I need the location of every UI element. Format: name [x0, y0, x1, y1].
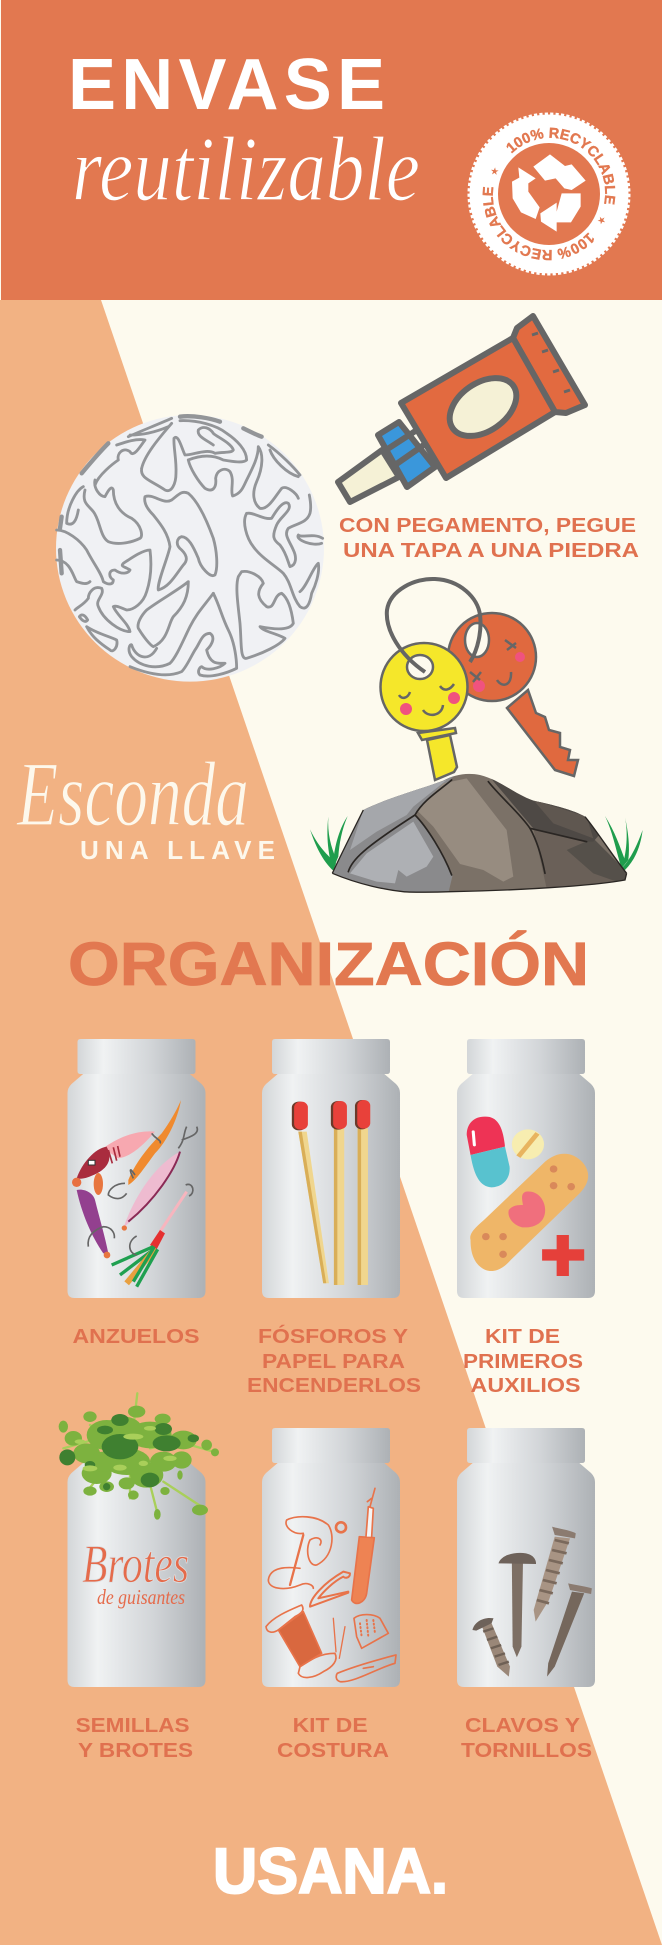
label: KIT DE COSTURA: COSTURA	[277, 1740, 389, 1762]
caption: glue a lid to a stone: UNA TAPA A UNA PIEDRA	[343, 540, 639, 562]
logo: USANA: USANA.	[213, 1835, 448, 1907]
text: Brotes de guisantes: de guisantes	[97, 1585, 185, 1609]
icon: glue tube	[338, 316, 585, 502]
badge: 100% recyclable seal	[468, 112, 630, 276]
heading: script Esconda: Esconda	[16, 743, 249, 845]
header banner	[1, 0, 662, 300]
label: KIT DE COSTURA	[277, 1715, 389, 1762]
badge: 100% recyclable seal: ★	[598, 216, 605, 224]
icon: orange key	[448, 613, 578, 776]
label: SEMILLAS Y BROTES	[76, 1715, 193, 1762]
jar: matches	[262, 1039, 400, 1298]
jar: pea sprouts	[59, 1393, 219, 1687]
jar: first aid	[457, 1039, 595, 1298]
label: FÓSFOROS Y PAPEL PARA ENCENDERLOS: ENCENDERLOS	[247, 1375, 421, 1397]
text: Brotes de guisantes	[82, 1534, 189, 1609]
badge: 100% recyclable seal: ★	[491, 168, 498, 175]
heading: ORGANIZACIÓN: ORGANIZACIÓN	[68, 930, 589, 998]
title: script reutilizable: reutilizable	[72, 118, 420, 220]
label: SEMILLAS Y BROTES: Y BROTES	[78, 1740, 193, 1762]
label: FÓSFOROS Y PAPEL PARA ENCENDERLOS: FÓSFOROS Y	[258, 1324, 409, 1348]
label: KIT DE PRIMEROS AUXILIOS: AUXILIOS	[470, 1375, 580, 1397]
label: ANZUELOS: ANZUELOS	[72, 1326, 200, 1348]
icon: rock with grass	[310, 770, 643, 893]
icon: painted stone	[56, 415, 324, 682]
icon: key ring	[387, 579, 481, 672]
badge: 100% recyclable seal: 100% RECYCLABLE	[506, 128, 616, 205]
label: CLAVOS Y TORNILLOS: TORNILLOS	[461, 1740, 592, 1762]
icon: grass tufts	[310, 816, 643, 871]
jar: fishing lures	[68, 1039, 206, 1298]
label: FÓSFOROS Y PAPEL PARA ENCENDERLOS	[247, 1324, 421, 1397]
label: KIT DE PRIMEROS AUXILIOS	[463, 1326, 583, 1397]
caption: glue a lid to a stone: CON PEGAMENTO, PEGUE	[339, 515, 636, 537]
badge: 100% recyclable seal: 100% RECYCLABLE	[482, 186, 594, 260]
label: SEMILLAS Y BROTES: SEMILLAS	[76, 1715, 190, 1737]
label: FÓSFOROS Y PAPEL PARA ENCENDERLOS: PAPEL PARA	[262, 1351, 405, 1373]
jar: nails and screws	[457, 1428, 595, 1687]
label: CLAVOS Y TORNILLOS: CLAVOS Y	[465, 1715, 581, 1737]
heading: UNA LLAVE: UNA LLAVE	[80, 835, 275, 865]
title: ENVASE: ENVASE	[68, 45, 385, 125]
caption: glue a lid to a stone	[339, 515, 639, 562]
label: CLAVOS Y TORNILLOS	[461, 1715, 592, 1762]
label: KIT DE COSTURA: KIT DE	[293, 1715, 368, 1737]
icon: sprouts	[59, 1393, 219, 1520]
text: Brotes de guisantes: Brotes	[82, 1534, 189, 1594]
label: KIT DE PRIMEROS AUXILIOS: KIT DE	[485, 1326, 560, 1348]
jar: sewing kit	[262, 1428, 400, 1687]
label: KIT DE PRIMEROS AUXILIOS: PRIMEROS	[463, 1351, 583, 1373]
icon: yellow key	[380, 643, 468, 780]
